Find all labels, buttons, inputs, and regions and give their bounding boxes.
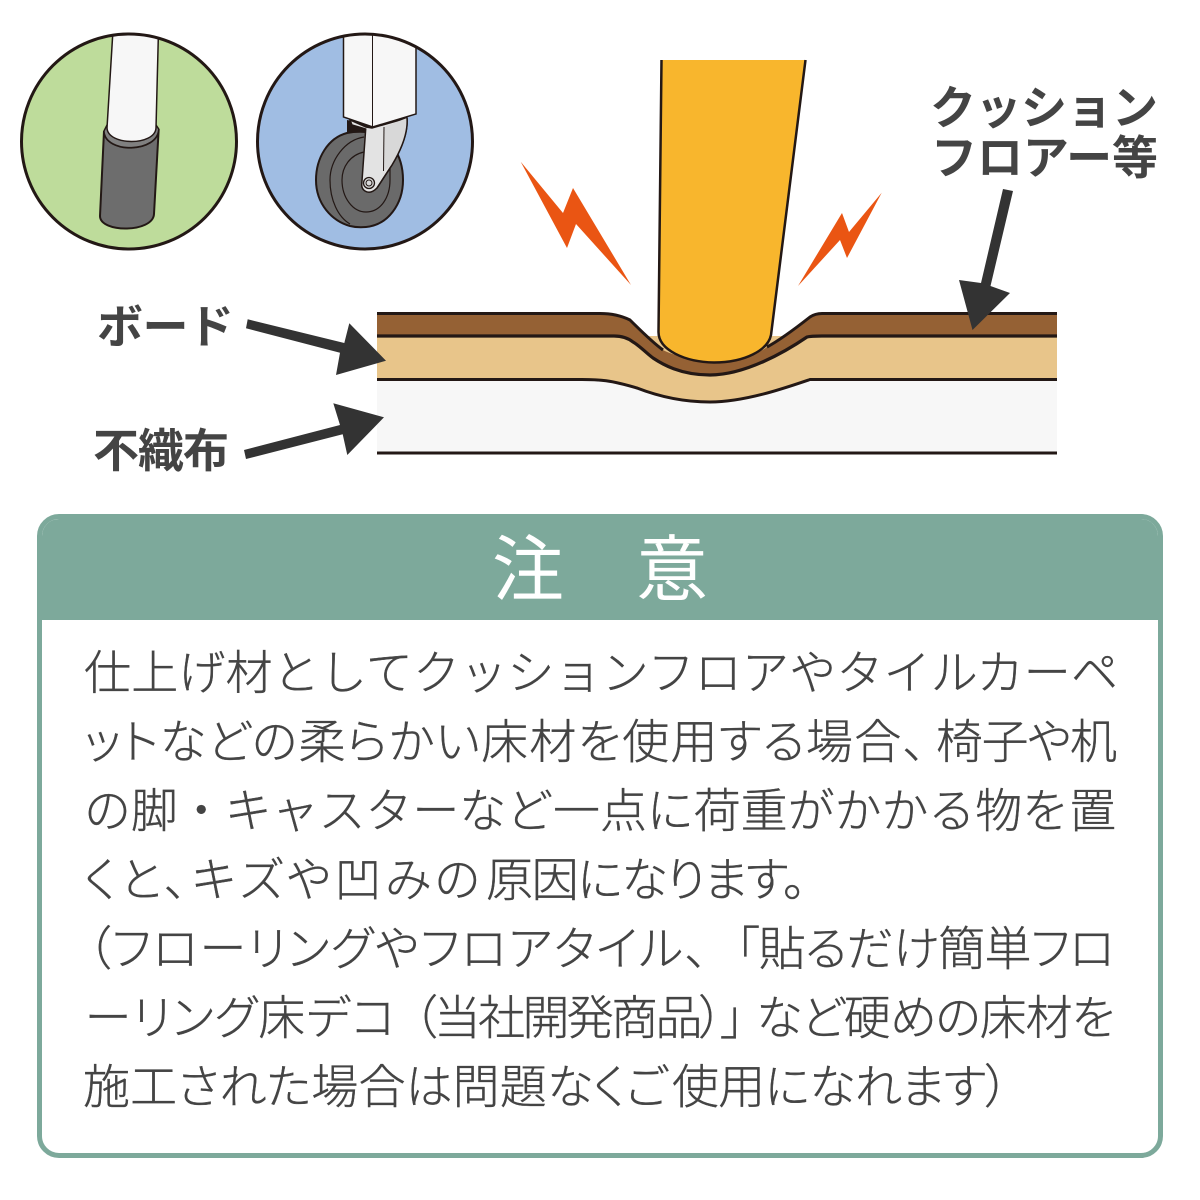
arrow: board (246, 319, 386, 375)
caution text: の脚・キャスターなど一点に荷重がかかる物を置 (84, 784, 1116, 838)
caution text: 仕上げ材としてクッションフロアやタイルカーペ (84, 646, 1118, 700)
label: cushion floor: クッション (930, 82, 1158, 134)
caution text: 施工された場合は問題なくご (83, 1060, 669, 1114)
label: cushion floor etc: フロアー等 (931, 132, 1158, 184)
panel heading: 注 (492, 531, 564, 611)
caution text: くと､キズや凹みの (84, 854, 480, 906)
caution text: など硬めの床材を (756, 992, 1115, 1044)
arrow: cushion floor (959, 189, 1013, 330)
caution text: （当社開発商品）」 (413, 992, 744, 1044)
icon: chair leg with caster wheel (258, 30, 472, 249)
caution text (83, 646, 1118, 1114)
chair leg (658, 60, 806, 362)
icon: right impact spark (798, 193, 882, 286)
caution text: 椅子や机 (936, 716, 1117, 768)
label: board: ボード (97, 301, 234, 353)
panel heading (37, 514, 1163, 620)
layer: board (377, 336, 1057, 402)
icon: chair leg with rubber cap (22, 30, 236, 249)
layer: non-woven fabric (377, 379, 1057, 453)
chair leg outline (658, 60, 806, 362)
label: non-woven fabric: 不織布 (93, 425, 229, 477)
floor cross-section (377, 314, 1057, 453)
caution text: ットなどの柔らかい床材を使用する場合、 (84, 716, 926, 768)
icon: left impact spark (521, 162, 631, 285)
caution text: （フローリングやフロアタイル、 (87, 922, 708, 976)
illustration area (20, 32, 1158, 477)
caution text: 原因になります。 (486, 854, 806, 906)
layer outlines (377, 314, 1057, 453)
arrow: non-woven fabric (244, 403, 384, 459)
caution text: 使用になれます） (672, 1060, 1009, 1114)
caution text: 「貼るだけ簡単フロ (736, 922, 1115, 976)
layer: cushion floor (377, 314, 1057, 375)
panel: caution (37, 514, 1163, 1158)
panel heading: 意 (636, 531, 708, 611)
caution text: ーリング床デコ (85, 992, 396, 1044)
